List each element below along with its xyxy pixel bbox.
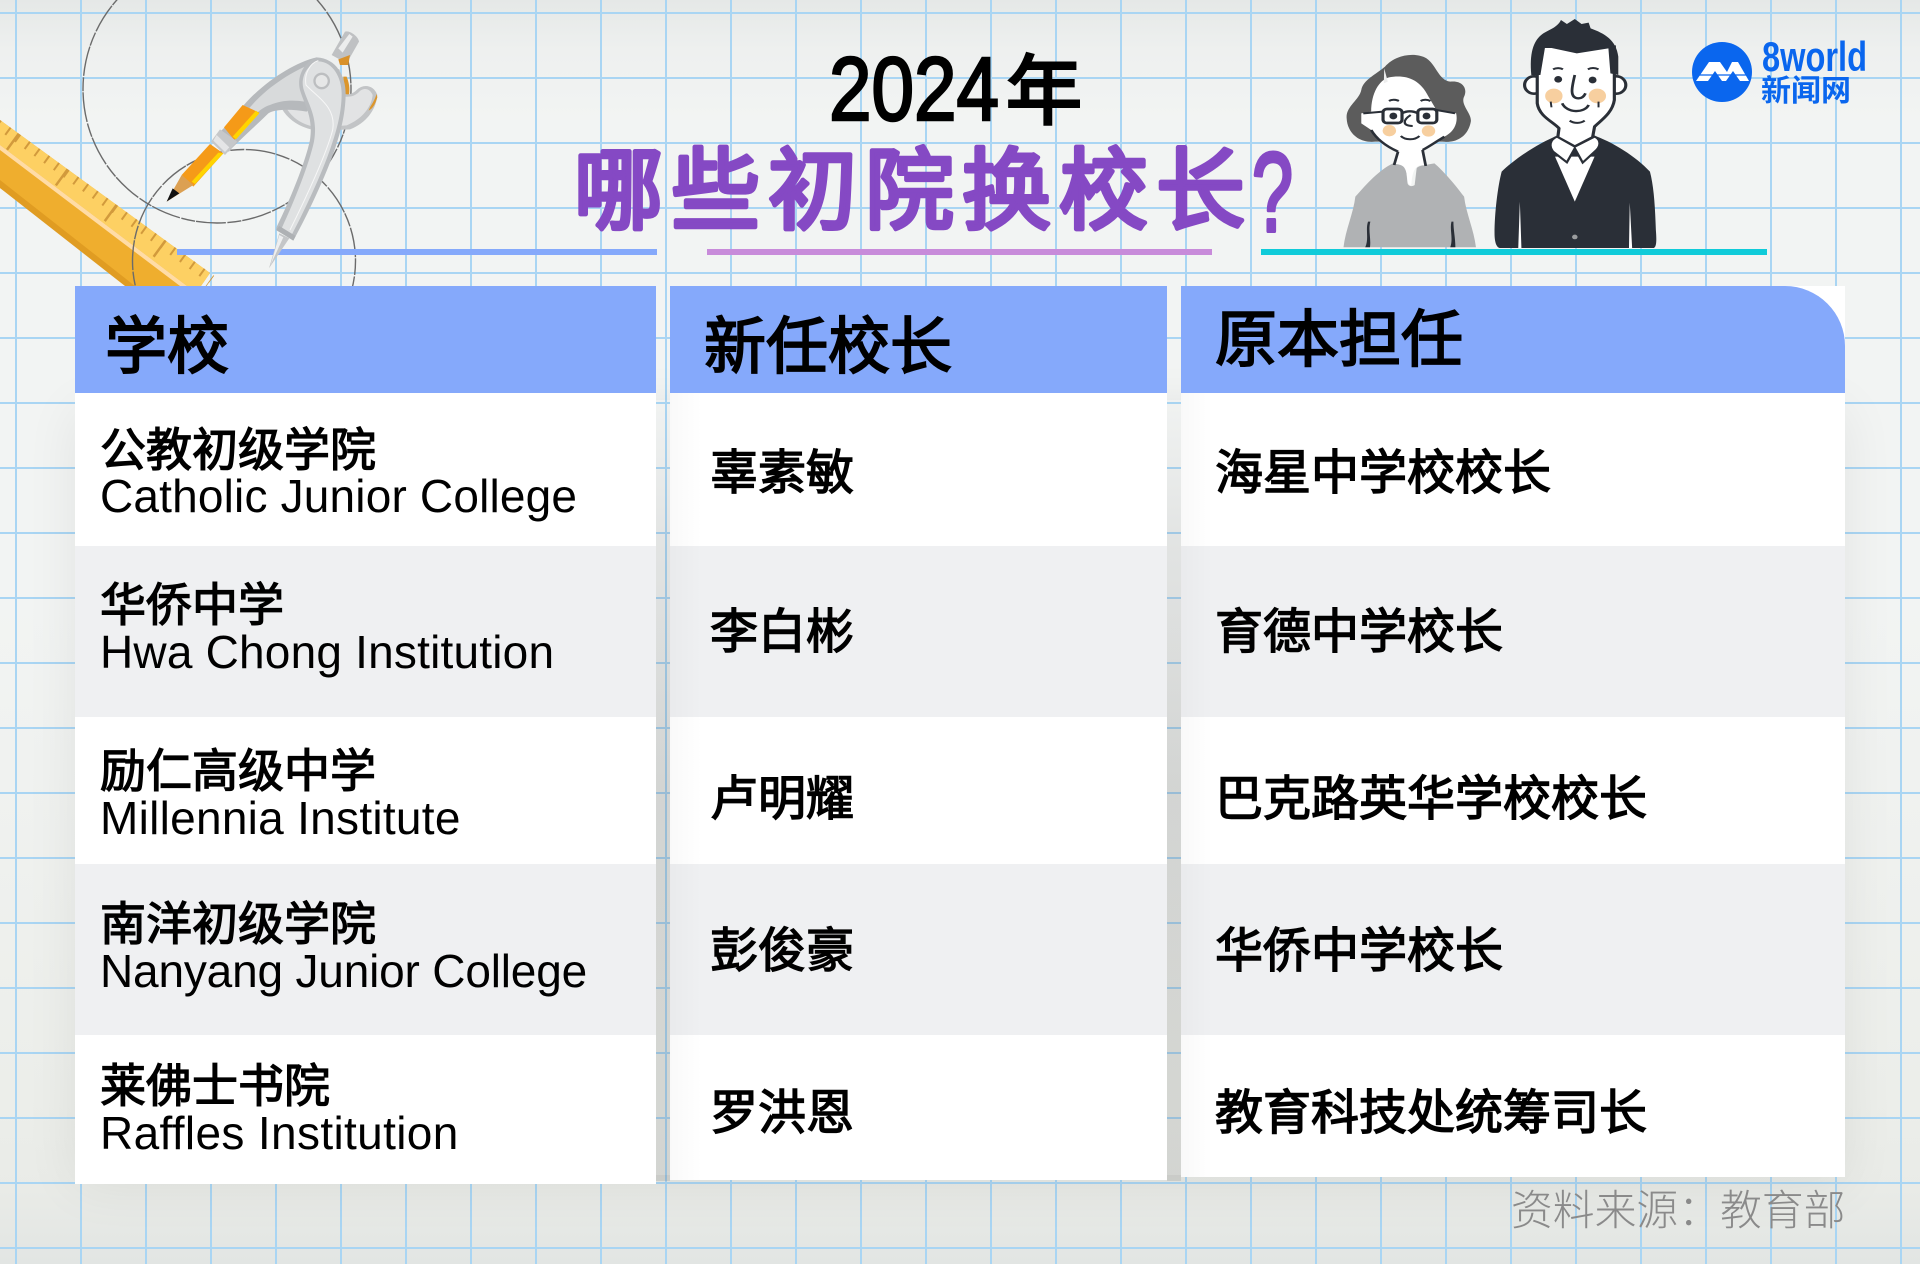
icon: compass with pencil [167, 31, 377, 268]
logo: 8world: 8world [1762, 33, 1867, 80]
row 3 school: Millennia Institute [100, 792, 461, 844]
row 5 school: 莱佛士书院 [100, 1060, 330, 1112]
heading: school: 学校 [105, 313, 229, 382]
heading: previous post: 原本担任 [1215, 306, 1463, 375]
underline: purple [707, 249, 1212, 255]
row 3 school [100, 745, 461, 844]
row 1 previous post: 海星中学校校长 [1215, 447, 1551, 500]
panel: previous post column [1181, 286, 1845, 1177]
gap shadow between school and new principal columns [656, 286, 670, 1181]
row 4 school: 南洋初级学院 [100, 898, 376, 950]
row 4 previous post: 华侨中学校长 [1215, 925, 1503, 978]
row 4 school [100, 898, 587, 997]
gap shadow between new principal and previous post columns [1167, 286, 1181, 1181]
row 2 principal: 李白彬 [710, 606, 854, 659]
title: 2024年: 年 [1006, 30, 1082, 140]
illustration: man principal [1495, 19, 1656, 248]
row 2 previous post: 育德中学校长 [1215, 606, 1503, 659]
title: 哪些初院换校长？: ? [1252, 130, 1293, 255]
row 4 school: Nanyang Junior College [100, 945, 587, 997]
panel: school column [75, 286, 656, 1184]
row 2 school: 华侨中学 [100, 579, 284, 631]
row 2 school [100, 579, 554, 678]
row 2 school: Hwa Chong Institution [100, 626, 554, 678]
row 1 school: Catholic Junior College [100, 470, 577, 522]
pencil drawn circles [83, 0, 356, 372]
row 3 school: 励仁高级中学 [100, 745, 376, 797]
row 1 school: 公教初级学院 [100, 424, 376, 476]
logo: 8world: 新闻网 [1761, 66, 1851, 110]
title: 2024年: 2024 [829, 40, 999, 140]
icon: ruler [0, 120, 211, 286]
row 1 school [100, 424, 577, 522]
row 5 school: Raffles Institution [100, 1107, 459, 1159]
table shadow [75, 400, 1845, 1175]
row 3 principal: 卢明耀 [710, 773, 854, 826]
row 3 previous post: 巴克路英华学校校长 [1215, 773, 1647, 826]
row 5 school [100, 1060, 459, 1159]
underline: blue [177, 249, 657, 255]
panel: new principal column [670, 286, 1167, 1180]
heading: new principal: 新任校长 [704, 313, 952, 382]
illustration: woman principal [1343, 55, 1476, 247]
row 5 previous post: 教育科技处统筹司长 [1215, 1087, 1647, 1140]
source note: 资料来源：教育部 [1511, 1178, 1845, 1238]
icon: logo circle [1692, 42, 1752, 102]
logo: 8world [1692, 33, 1867, 110]
row 4 principal: 彭俊豪 [710, 925, 854, 978]
title: 哪些初院换校长？: 哪些初院换校长 [574, 119, 1253, 248]
row 1 principal: 辜素敏 [710, 447, 854, 500]
underline: teal [1261, 249, 1767, 255]
row 5 principal: 罗洪恩 [710, 1087, 854, 1140]
